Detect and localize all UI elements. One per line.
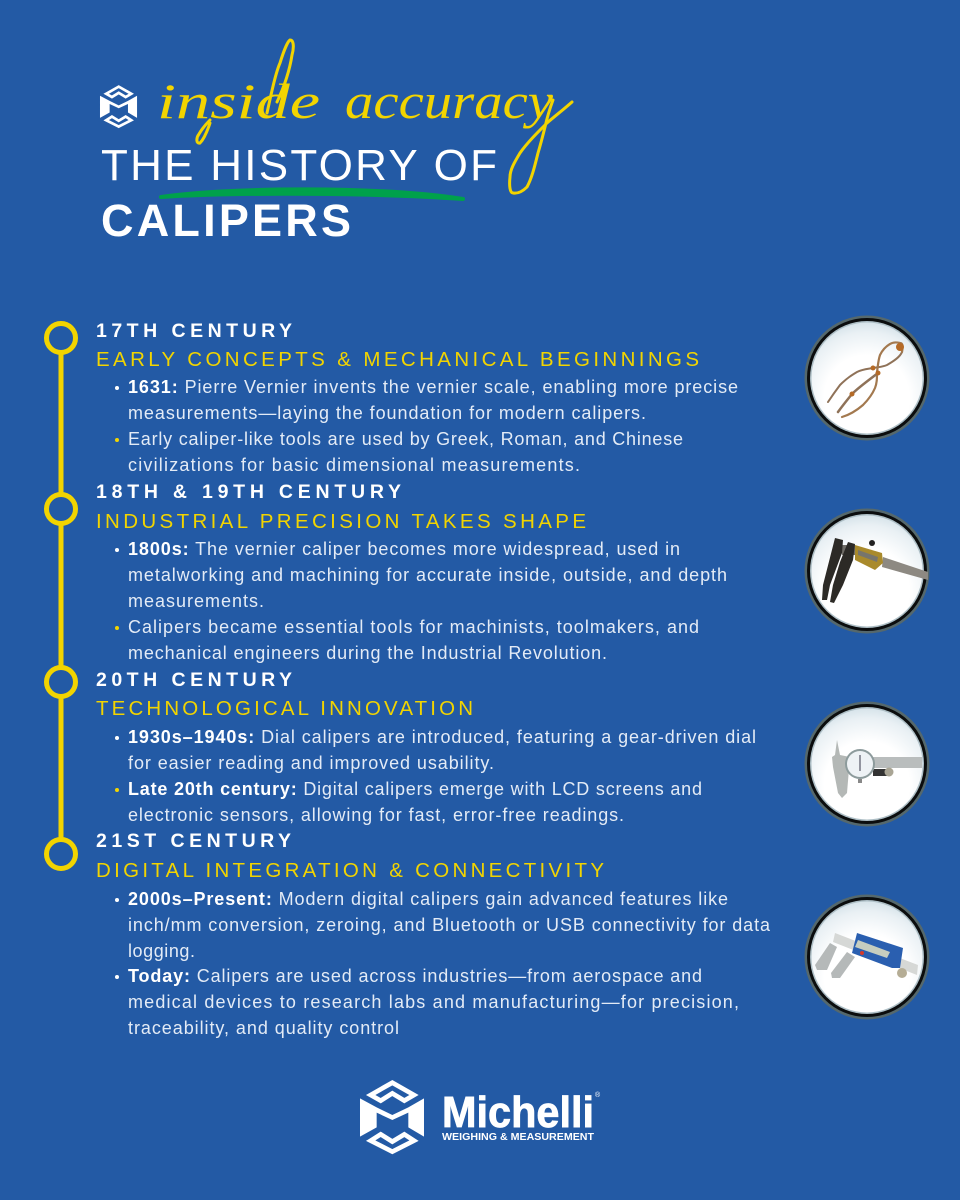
section: 20th century <box>96 669 756 825</box>
section: 21st century: logging. <box>128 941 195 961</box>
title line: calipers: CALIPERS <box>101 195 351 246</box>
icon: Michelli mark <box>360 1083 424 1152</box>
registered mark: ® <box>595 1091 601 1099</box>
section: 17th century: measurements—laying the foundation for modern calipers. <box>128 403 646 423</box>
section: 17th century: civilizations for basic dimensional measurements. <box>128 455 580 475</box>
section: 20th century: Late 20th century: Digital calipers emerge with LCD screens and <box>128 779 702 799</box>
script heading: inside accuracy: inside <box>157 73 320 129</box>
section: 18th and 19th century: 18TH & 19TH CENTURY <box>96 481 401 503</box>
script heading: inside accuracy <box>157 40 572 193</box>
footer Michelli logo <box>360 1083 601 1152</box>
script heading: inside accuracy: accuracy <box>345 73 554 129</box>
section: 18th and 19th century: INDUSTRIAL PRECISION TAKES SHAPE <box>96 510 586 533</box>
section: 17th century: 17TH CENTURY <box>96 320 292 342</box>
section: 20th century: 20TH CENTURY <box>96 669 292 691</box>
section: 21st century: 21ST CENTURY <box>96 830 291 852</box>
section: 18th and 19th century: metalworking and machining for accurate inside, outside, and depth <box>128 565 727 585</box>
section: 17th century: 1631: Pierre Vernier invents the vernier scale, enabling more precise <box>128 377 738 397</box>
section: 21st century: medical devices to research labs and manufacturing—for precision, <box>128 992 739 1012</box>
section: 21st century: traceability, and quality control <box>128 1018 399 1038</box>
icon: small Michelli logo <box>100 87 137 127</box>
section: 18th and 19th century: measurements. <box>128 591 264 611</box>
section: 21st century: inch/mm conversion, zeroing, and Bluetooth or USB connectivity for data <box>128 915 771 935</box>
section: 20th century: electronic sensors, allowing for fast, error-free readings. <box>128 805 624 825</box>
section: 20th century: for easier reading and improved usability. <box>128 753 494 773</box>
section: 17th century: Early caliper-like tools are used by Greek, Roman, and Chinese <box>128 429 683 449</box>
header title block <box>100 40 572 246</box>
section: 17th century <box>96 320 738 475</box>
wordmark: Michelli <box>442 1088 594 1137</box>
icon: dial caliper <box>804 702 930 826</box>
icon: vernier caliper <box>804 508 930 634</box>
section: 21st century <box>96 830 771 1038</box>
section: 17th century: EARLY CONCEPTS & MECHANICAL BEGINNINGS <box>96 348 699 371</box>
icon: early dividers <box>804 316 930 440</box>
section: 21st century: DIGITAL INTEGRATION & CONNECTIVITY <box>96 859 604 882</box>
section: 18th and 19th century: 1800s: The vernier caliper becomes more widespread, used in <box>128 539 680 559</box>
tagline: WEIGHING & MEASUREMENT <box>442 1131 595 1143</box>
icon: digital caliper <box>804 894 930 1020</box>
section: 18th and 19th century: Calipers became essential tools for machinists, toolmakers, and <box>128 617 699 637</box>
section: 20th century: 1930s–1940s: Dial calipers are introduced, featuring a gear-driven dial <box>128 727 756 747</box>
title line: the history of: THE HISTORY OF <box>101 141 497 190</box>
section: 20th century: TECHNOLOGICAL INNOVATION <box>96 697 473 720</box>
section: 18th and 19th century <box>96 481 727 663</box>
section: 21st century: Today: Calipers are used across industries—from aerospace and <box>128 966 702 986</box>
section: 21st century: 2000s–Present: Modern digital calipers gain advanced features like <box>128 889 728 909</box>
timeline <box>46 324 76 868</box>
green underline swoosh <box>161 189 463 199</box>
section: 18th and 19th century: mechanical engineers during the Industrial Revolution. <box>128 643 607 663</box>
